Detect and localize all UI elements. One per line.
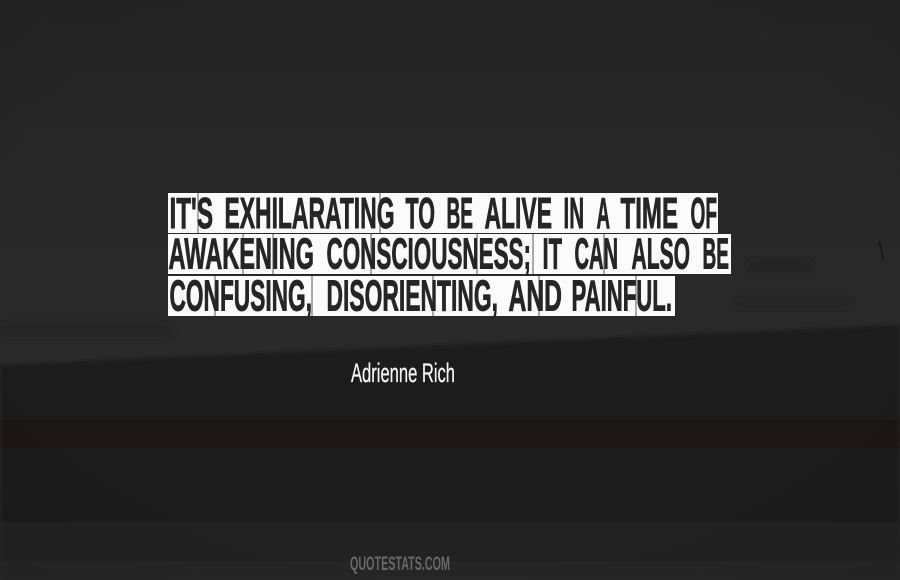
quote block <box>168 189 731 320</box>
quote line 1: TIME <box>620 189 678 238</box>
quote line 1: ALIVE <box>484 189 552 238</box>
quote line 3: PAINFUL. <box>572 272 672 320</box>
author name: Adrienne Rich <box>351 358 455 388</box>
quote line 2: CONSCIOUSNESS; <box>326 230 531 278</box>
quote line 3: DISORIENTING, <box>326 272 498 320</box>
quote line 1 <box>168 189 718 238</box>
quote line 2: CAN <box>574 230 618 278</box>
quote line 1: A <box>596 189 610 238</box>
quote line 2: ALSO <box>632 230 690 278</box>
quote line 1: IN <box>564 189 584 238</box>
footer site name: QUOTESTATS.COM <box>350 554 450 575</box>
quote line 1: BE <box>446 189 473 238</box>
quote line 1: TO <box>406 189 435 238</box>
quote line 1: EXHILARATING <box>224 189 394 238</box>
quote block: OF <box>690 189 717 238</box>
quote line 2: IT <box>542 230 562 278</box>
text: BE <box>702 230 729 278</box>
quote line 3: CONFUSING, <box>170 272 312 320</box>
quote line 2: AWAKENING <box>168 230 314 278</box>
quote line 3 <box>168 272 675 320</box>
quote line 3: AND <box>508 272 562 320</box>
quote line 1: IT'S <box>170 189 213 238</box>
